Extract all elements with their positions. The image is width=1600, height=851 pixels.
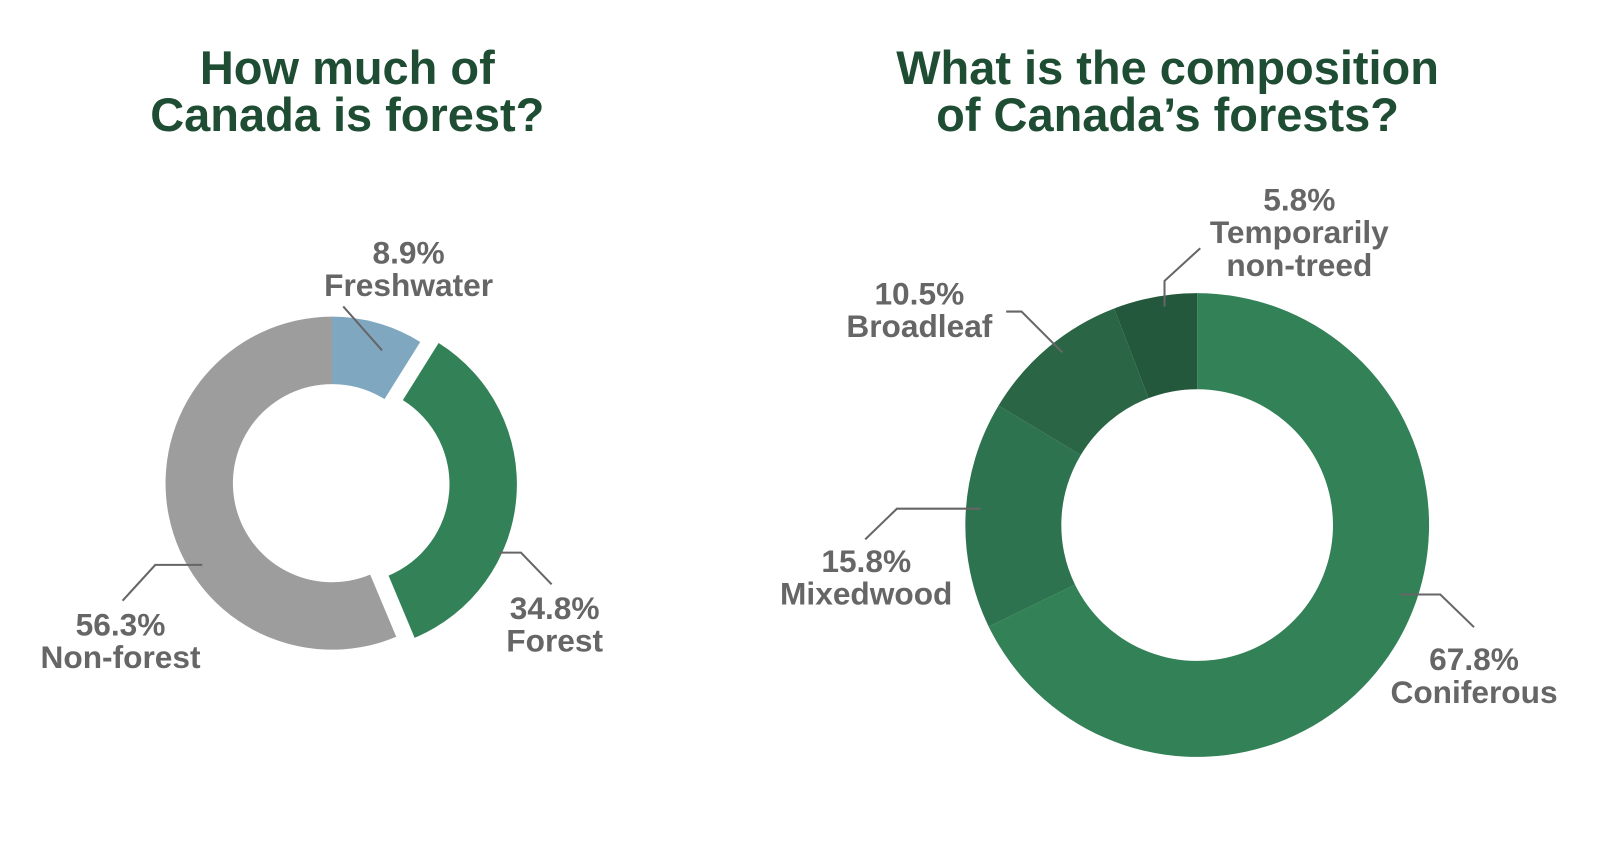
title: right: of Canada’s forests? bbox=[936, 88, 1399, 141]
donut chart: forest composition bbox=[965, 293, 1429, 757]
label: freshwater: Freshwater bbox=[324, 267, 493, 303]
label: forest bbox=[506, 590, 604, 659]
label: coniferous: Coniferous bbox=[1390, 674, 1558, 710]
label: forest: Forest bbox=[506, 623, 604, 659]
leader lines: right bbox=[865, 248, 1474, 627]
label: forest: 34.8% bbox=[510, 590, 600, 626]
label: mixedwood bbox=[780, 543, 952, 612]
label: mixedwood: 15.8% bbox=[821, 543, 911, 579]
label: non-forest: 56.3% bbox=[76, 606, 165, 642]
label: non-forest: Non-forest bbox=[41, 639, 201, 675]
label: coniferous bbox=[1390, 641, 1558, 710]
title: left: Canada is forest? bbox=[150, 88, 544, 141]
label: broadleaf: Broadleaf bbox=[846, 308, 993, 344]
label: freshwater bbox=[324, 235, 493, 303]
label: temporarily non-treed: 5.8% bbox=[1263, 181, 1335, 217]
label: mixedwood: Mixedwood bbox=[780, 576, 952, 612]
label: freshwater: 8.9% bbox=[373, 235, 445, 271]
title: right: What is the composition bbox=[896, 41, 1439, 94]
title: left bbox=[150, 41, 544, 141]
title: right bbox=[896, 41, 1439, 141]
title: left: How much of bbox=[200, 41, 495, 94]
label: temporarily non-treed bbox=[1210, 181, 1389, 283]
label: coniferous: 67.8% bbox=[1429, 641, 1519, 677]
label: non-forest bbox=[41, 606, 201, 675]
label: temporarily non-treed: Temporarily bbox=[1210, 214, 1389, 250]
label: broadleaf bbox=[846, 275, 993, 344]
leader lines: left bbox=[123, 306, 552, 601]
label: temporarily non-treed: non-treed bbox=[1226, 247, 1372, 283]
label: broadleaf: 10.5% bbox=[874, 275, 964, 311]
donut chart: land cover bbox=[166, 317, 517, 650]
